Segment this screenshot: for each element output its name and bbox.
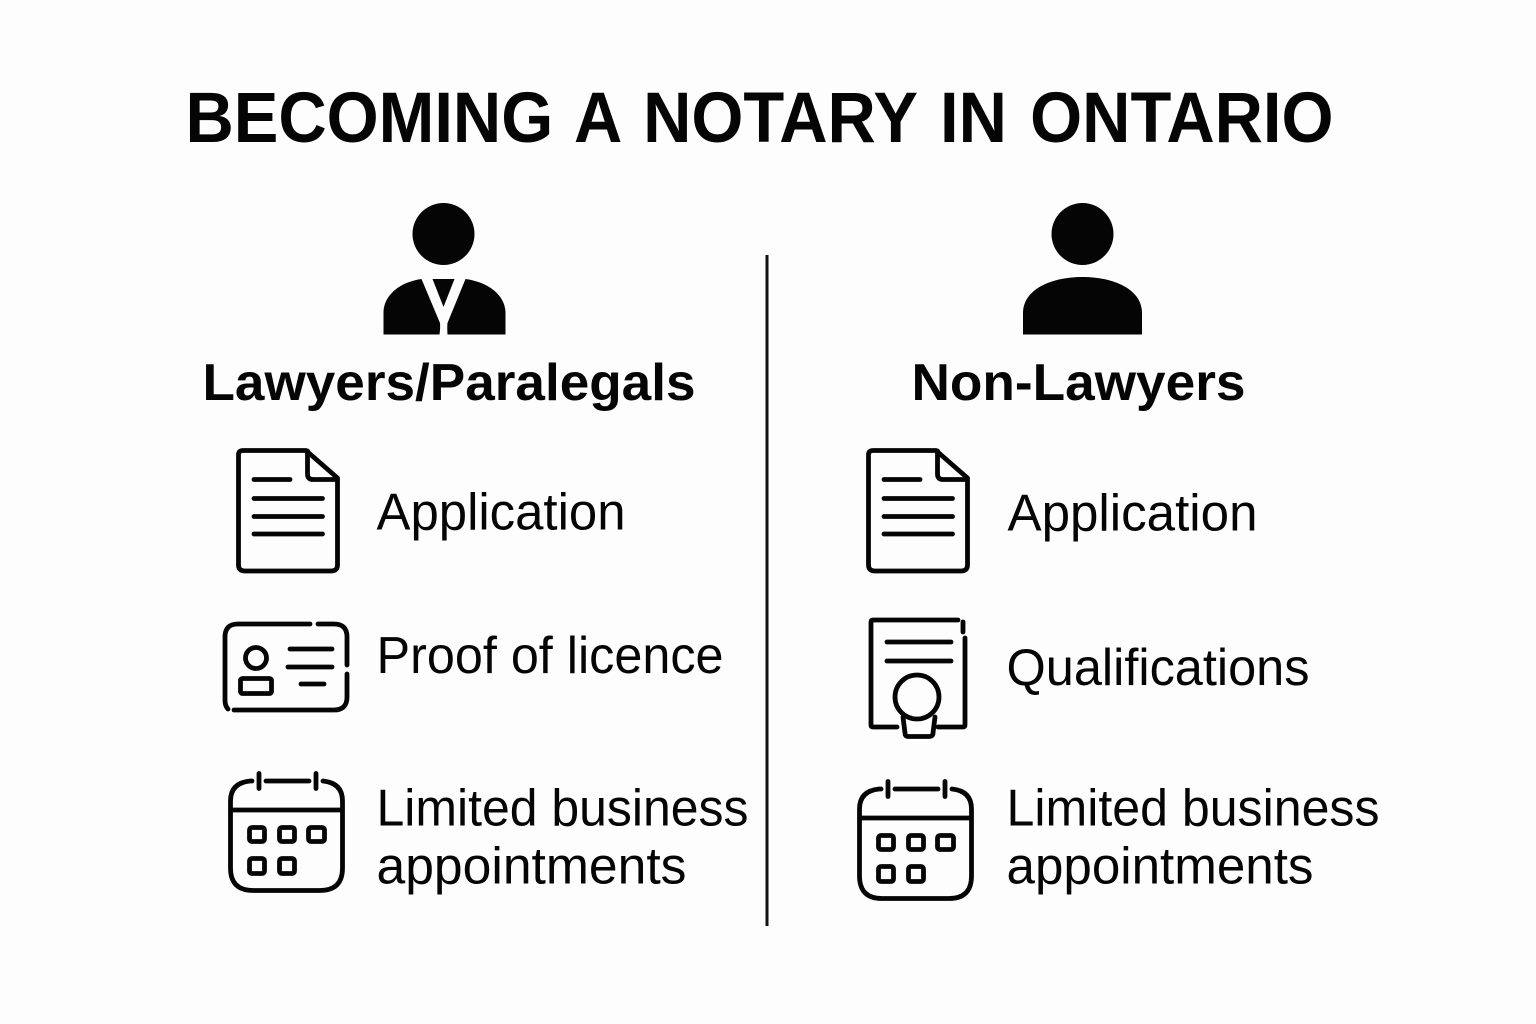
text: limited business appointments: Limited business	[376, 780, 748, 838]
text: limited business appointments: appointments	[1006, 838, 1314, 896]
text: application: Application	[1008, 484, 1258, 542]
icon: document	[868, 450, 968, 571]
icon: document	[238, 450, 338, 571]
title: BECOMING A NOTARY IN ONTARIO	[186, 79, 1334, 158]
heading: lawyers/paralegals: Lawyers/Paralegals	[202, 354, 696, 412]
icon: calendar	[230, 774, 342, 890]
text: qualifications: Qualifications	[1006, 639, 1310, 697]
heading: non-lawyers: Non-Lawyers	[912, 354, 1246, 412]
text: limited business appointments: appointments	[376, 838, 686, 896]
panel: non-lawyers	[860, 203, 1380, 898]
icon: certificate	[871, 620, 965, 736]
text: limited business appointments: Limited business	[1006, 780, 1380, 838]
icon: person in suit	[384, 203, 506, 334]
icon: person	[1023, 203, 1142, 334]
text: proof of licence: Proof of licence	[376, 627, 724, 685]
divider between columns	[766, 255, 768, 926]
icon: licence card	[225, 624, 347, 710]
text: limited business appointments	[376, 780, 748, 896]
panel: lawyers and paralegals	[202, 203, 748, 896]
icon: calendar	[860, 782, 972, 898]
text: application: Application	[376, 484, 626, 542]
text: limited business appointments	[1006, 780, 1380, 896]
